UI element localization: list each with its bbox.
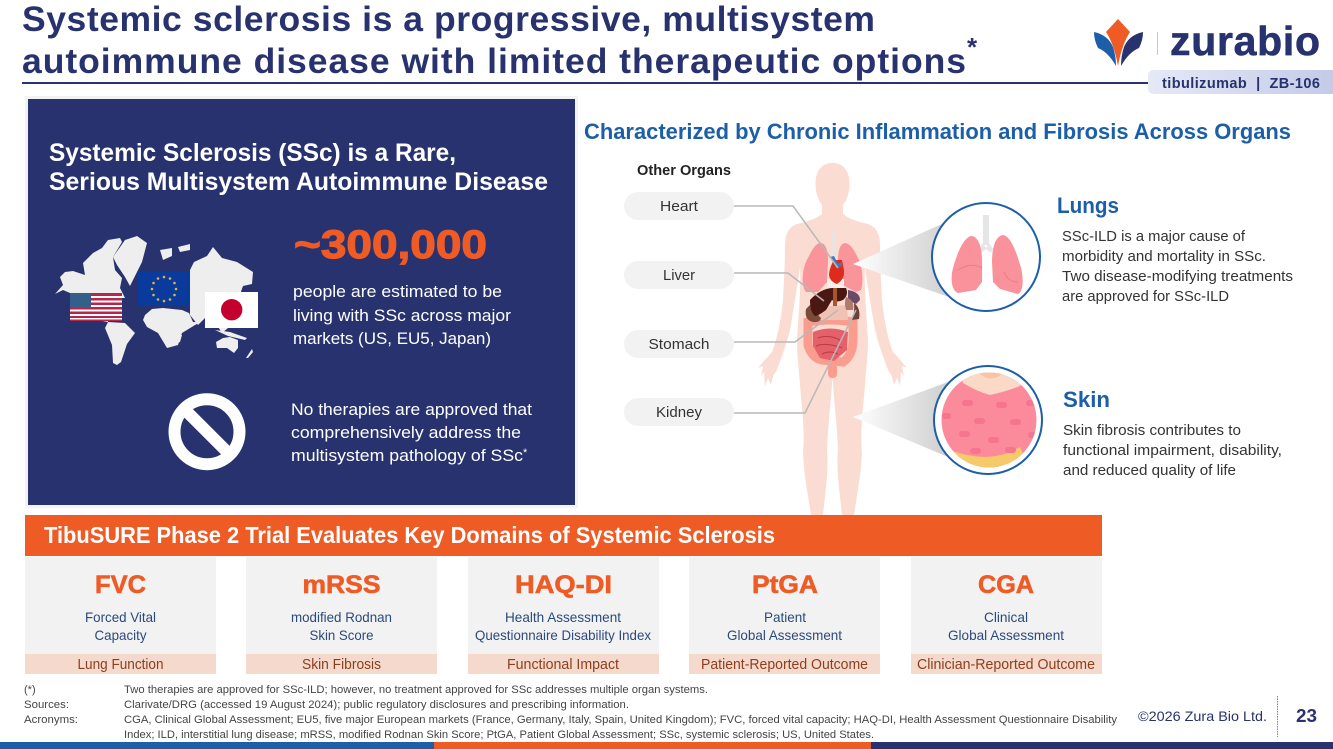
label: stomach: Stomach (648, 337, 710, 353)
label: liver: Liver (663, 268, 695, 284)
lungs description: SSc-ILD is a major cause of (1062, 229, 1246, 245)
icon: lungs (952, 215, 1023, 294)
other organs heading: Other Organs (637, 163, 731, 179)
flag: Japan (205, 292, 258, 328)
icon: zurabio logo (1094, 18, 1320, 66)
footnotes: Sources: (24, 699, 69, 711)
leader lines (734, 206, 856, 413)
product tag: tibulizumab | ZB-106 (1162, 76, 1320, 92)
page number: 23 (1296, 706, 1317, 726)
skin description: and reduced quality of life (1063, 463, 1236, 479)
card: mRSS (246, 557, 437, 674)
card: CGA (911, 557, 1102, 674)
footnotes: (*) (24, 684, 36, 696)
footnotes: Clarivate/DRG (accessed 19 August 2024); public regulatory disclosures and prescribing information. (124, 699, 629, 711)
card: mRSS: Skin Score (310, 627, 374, 643)
label: heart (624, 192, 734, 220)
card: CGA: Global Assessment (948, 627, 1064, 643)
skin description: Skin fibrosis contributes to (1063, 423, 1241, 439)
patient count: ~300,000 (294, 223, 487, 267)
icon: zurabio logo: zurabio (1170, 18, 1320, 64)
footnotes: Acronyms: (24, 714, 78, 726)
patient count description: living with SSc across major (293, 306, 511, 325)
no approved therapies text: comprehensively address the (291, 423, 521, 442)
flag: EU (138, 271, 190, 306)
card: PtGA: Patient (764, 609, 806, 625)
label: stomach (624, 330, 734, 358)
flag: USA (70, 293, 122, 321)
card: FVC: Capacity (94, 627, 146, 643)
footnotes: Index; ILD, interstitial lung disease; mRSS, modified Rodnan Skin Score; PtGA, Patient Global Assessment; SSc, systemic sclerosis; US, United States. (124, 729, 874, 741)
card: HAQ-DI: HAQ-DI (515, 571, 612, 599)
product tag (1148, 70, 1333, 94)
organ: trachea (831, 232, 835, 258)
no approved therapies text (291, 400, 532, 465)
card: PtGA: PtGA (752, 571, 818, 599)
copyright: ©2026 Zura Bio Ltd. (1138, 708, 1267, 724)
callout: other organs (624, 163, 856, 426)
panel: disease overview (25, 96, 578, 508)
card: FVC: Forced Vital (85, 609, 156, 625)
section heading: organs: Characterized by Chronic Inflammation and Fibrosis Across Organs (584, 119, 1291, 144)
callout: lungs (853, 193, 1293, 311)
title (22, 0, 978, 81)
patient count description: people are estimated to be (293, 282, 502, 301)
card: PtGA: Global Assessment (727, 627, 842, 643)
card: FVC: FVC (95, 571, 146, 599)
icon: skin cross-section (940, 372, 1038, 470)
footnotes: CGA, Clinical Global Assessment; EU5, five major European markets (France, Germany, Italy, Spain, United Kingdom); FVC, forced vital capacity; HAQ-DI, Health Assessment Questionnaire Disability (124, 714, 1118, 726)
no approved therapies text: No therapies are approved that (291, 400, 532, 419)
card: FVC (25, 557, 216, 674)
card: CGA: Clinical (984, 609, 1028, 625)
card: CGA: CGA (978, 571, 1034, 599)
card: mRSS: mRSS (302, 571, 380, 599)
title: Systemic sclerosis is a progressive, multisystem (22, 0, 875, 39)
no approved therapies text: multisystem pathology of SSc (291, 446, 524, 465)
patient count description: markets (US, EU5, Japan) (293, 329, 491, 348)
skin description: functional impairment, disability, (1063, 443, 1282, 459)
body illustration (758, 163, 907, 515)
organ: small intestine (813, 328, 848, 361)
label: kidney (624, 398, 734, 426)
card: FVC: Lung Function (78, 657, 164, 673)
card: CGA: Clinician-Reported Outcome (917, 657, 1095, 673)
world map with flags (55, 236, 258, 365)
organ: lungs (803, 243, 862, 292)
card: HAQ-DI: Questionnaire Disability Index (475, 627, 651, 643)
callout: skin (853, 366, 1282, 479)
lungs description: are approved for SSc-ILD (1062, 289, 1229, 305)
footnotes: Two therapies are approved for SSc-ILD; however, no treatment approved for SSc addresses multiple organ systems. (124, 684, 708, 696)
title: autoimmune disease with limited therapeutic options (22, 41, 966, 81)
panel heading: Serious Multisystem Autoimmune Disease (49, 168, 548, 196)
organ: liver, stomach and kidney (806, 288, 860, 322)
card: mRSS: Skin Fibrosis (302, 657, 381, 673)
card: PtGA (689, 557, 880, 674)
label: liver (624, 261, 734, 289)
bottom colour bar (0, 742, 1333, 749)
title: * (967, 32, 978, 62)
lungs heading: Lungs (1057, 193, 1119, 218)
card: PtGA: Patient-Reported Outcome (701, 657, 868, 673)
card: mRSS: modified Rodnan (291, 609, 392, 625)
organ: heart (827, 256, 844, 289)
icon: prohibition sign (174, 399, 240, 464)
no approved therapies text: * (523, 447, 528, 459)
panel heading: Systemic Sclerosis (SSc) is a Rare, (49, 139, 456, 167)
label: heart: Heart (660, 199, 698, 215)
card: HAQ-DI: Health Assessment (505, 609, 621, 625)
lungs description: Two disease-modifying treatments (1062, 269, 1293, 285)
banner: TibuSURE trial (25, 515, 1102, 556)
panel heading (49, 139, 548, 196)
patient count description (293, 282, 511, 348)
lungs description: morbidity and mortality in SSc. (1062, 249, 1266, 265)
label: kidney: Kidney (656, 405, 703, 421)
card: HAQ-DI: Functional Impact (507, 657, 619, 673)
organ: colon (808, 320, 853, 378)
skin heading: Skin (1063, 387, 1110, 412)
footnotes (24, 684, 1118, 741)
lungs description (1062, 229, 1293, 305)
skin description (1063, 423, 1282, 479)
banner: TibuSURE trial: TibuSURE Phase 2 Trial Evaluates Key Domains of Systemic Sclerosis (44, 522, 775, 548)
card: HAQ-DI (468, 557, 659, 674)
